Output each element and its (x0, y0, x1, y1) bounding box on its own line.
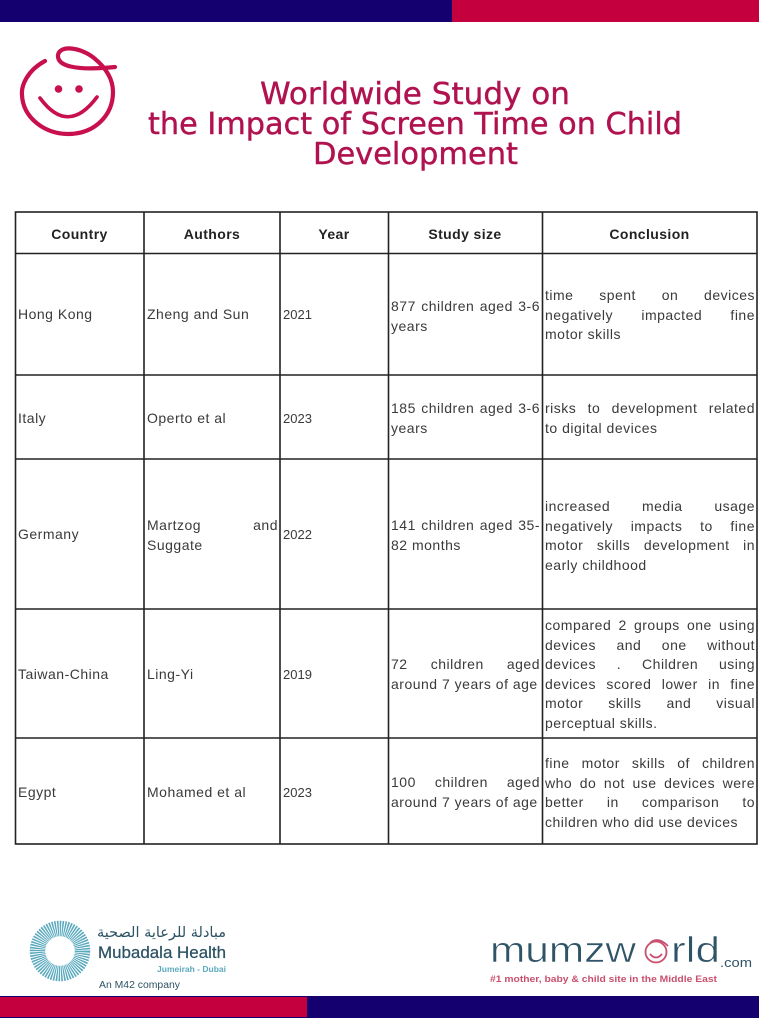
logo: Mubadala Health: Mubadala Health (98, 943, 226, 962)
row: Germany: negatively impacts to fine (545, 518, 755, 534)
table header: Authors (184, 226, 240, 242)
bottom colour bar (0, 996, 759, 1018)
title: Worldwide Study on (260, 77, 570, 112)
row: Taiwan-China: 72 children aged (391, 656, 540, 672)
row: Hong Kong (18, 287, 755, 342)
row: Germany: 82 months (391, 536, 461, 552)
row: Egypt: Egypt (18, 784, 56, 800)
row: Hong Kong: negatively impacted fine (545, 306, 755, 322)
row: Hong Kong: years (391, 318, 428, 334)
row: Taiwan-China: 2019 (283, 667, 312, 682)
row: Germany: increased media usage (545, 498, 755, 514)
row: Taiwan-China: devices . Children using (545, 656, 755, 672)
table header: Country (51, 226, 108, 242)
row: Italy: risks to development related (545, 400, 755, 416)
logo: mumzworld: rld (671, 930, 720, 970)
row: Germany (18, 498, 755, 573)
row: Italy: Operto et al (147, 410, 226, 426)
row: Italy (18, 400, 755, 436)
logo: mumzworld: .com (720, 955, 752, 970)
row: Egypt (18, 755, 755, 830)
row: Hong Kong: Zheng and Sun (147, 306, 249, 322)
row: Italy: years (391, 420, 428, 436)
row: Taiwan-China (18, 617, 755, 731)
row: Egypt: who do not use devices were (545, 774, 755, 790)
row: Egypt: better in comparison to (545, 794, 755, 810)
logo: mumzworld: #1 mother, baby & child site in the Middle East (490, 974, 717, 984)
row: Taiwan-China: Ling-Yi (147, 666, 194, 682)
row: Egypt: 2023 (283, 785, 312, 800)
table header: Study size (428, 226, 502, 242)
row: Taiwan-China: devices scored lower in fine (545, 676, 755, 692)
logo: mumzworld (490, 930, 752, 984)
row: Germany: early childhood (545, 556, 647, 572)
title: the Impact of Screen Time on Child (148, 107, 682, 142)
row: Italy: to digital devices (545, 420, 658, 436)
row: Germany: Suggate (147, 536, 203, 552)
row: Germany: Martzog and (147, 517, 278, 533)
logo: Mubadala Health (30, 920, 226, 991)
row: Hong Kong: time spent on devices (545, 287, 755, 303)
logo: Mubadala Health: An M42 company (99, 980, 180, 991)
row: Egypt: Mohamed et al (147, 784, 246, 800)
row: Germany: 141 children aged 35- (391, 517, 540, 533)
row: Italy: Italy (18, 410, 46, 426)
row: Taiwan-China: Taiwan-China (18, 666, 109, 682)
table header (51, 226, 690, 242)
row: Germany: motor skills development in (545, 537, 755, 553)
row: Taiwan-China: motor skills and visual (545, 695, 755, 711)
row: Egypt: 100 children aged (391, 774, 540, 790)
row: Germany: Germany (18, 526, 79, 542)
row: Egypt: around 7 years of age (391, 794, 538, 810)
row: Egypt: fine motor skills of children (545, 755, 755, 771)
logo: Mubadala Health: مبادلة للرعاية الصحية (97, 925, 226, 941)
logo: mumzworld: mumzw (490, 930, 637, 970)
row: Taiwan-China: compared 2 groups one using (545, 617, 755, 633)
row: Hong Kong: 877 children aged 3-6 (391, 298, 540, 314)
table header: Conclusion (609, 226, 690, 242)
title (148, 77, 682, 172)
row: Taiwan-China: devices and one without (545, 636, 755, 652)
top colour bar (0, 0, 759, 22)
row: Germany: 2022 (283, 527, 312, 542)
row: Italy: 185 children aged 3-6 (391, 400, 540, 416)
row: Hong Kong: motor skills (545, 326, 621, 342)
row: Egypt: children who did use devices (545, 814, 738, 830)
row: Hong Kong: 2021 (283, 307, 312, 322)
icon: smiling child logo (20, 46, 118, 136)
row: Taiwan-China: perceptual skills. (545, 714, 658, 730)
table header: Year (318, 226, 350, 242)
row: Hong Kong: Hong Kong (18, 306, 93, 322)
logo: Mubadala Health: Jumeirah - Dubai (157, 964, 226, 974)
title: Development (313, 137, 518, 172)
row: Taiwan-China: around 7 years of age (391, 676, 538, 692)
row: Italy: 2023 (283, 411, 312, 426)
table grid (14, 211, 758, 845)
